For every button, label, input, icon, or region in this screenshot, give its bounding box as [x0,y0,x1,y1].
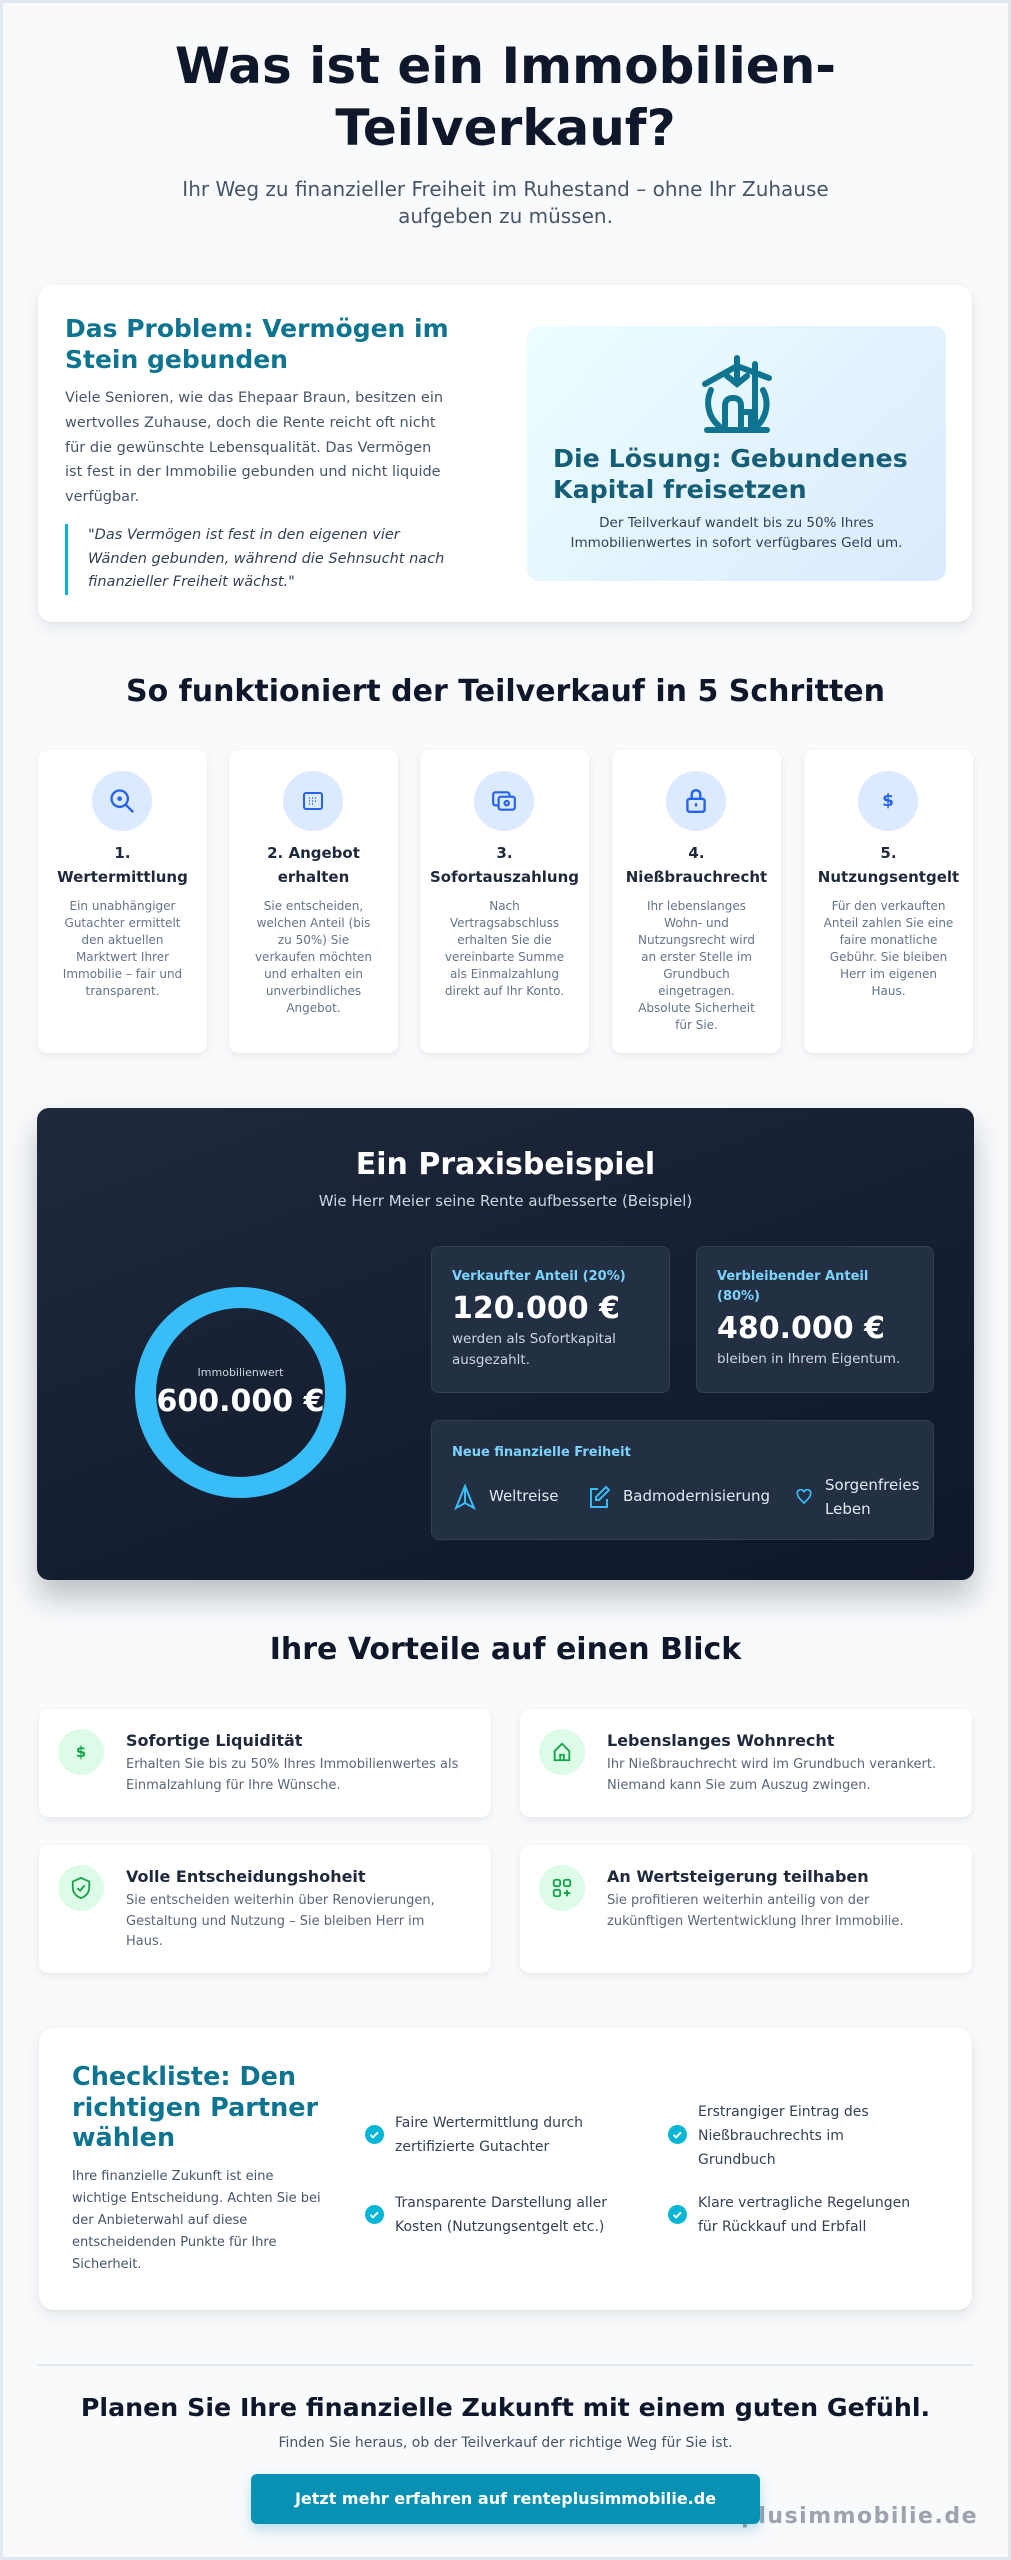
step 5: faire monatliche [840,933,937,947]
benefit: value growth: zukünftigen Wertentwicklung Ihrer Immobilie. [607,1914,904,1928]
box: remaining share: bleiben in Ihrem Eigentum. [717,1351,900,1367]
step 3: als Einmalzahlung [450,967,559,981]
benefit: residence right: Ihr Nießbrauchrecht wird im Grundbuch verankert. [607,1757,936,1772]
step 1: 1. [114,844,131,862]
check item 1 [365,2115,583,2155]
benefit: residence right [520,1709,972,1817]
box: sold share: 120.000 € [452,1291,620,1326]
check item 3: Kosten (Nutzungsentgelt etc.) [395,2219,604,2235]
box: new freedom: Badmodernisierung [623,1487,770,1505]
box: new freedom: Sorgenfreies [825,1476,919,1494]
step 1: Immobilie – fair und [63,967,182,981]
box: new freedom: Weltreise [489,1487,559,1505]
box: sold share [431,1246,670,1393]
heading: solution: Die Lösung: Gebundenes [553,444,908,473]
step 3: direkt auf Ihr Konto. [445,984,564,998]
benefit: decisions: Haus. [126,1934,163,1949]
panel: solution [527,326,946,581]
step 3: Sofortauszahlung [430,868,579,886]
heading: checklist: wählen [72,2123,175,2153]
check item 2: Nießbrauchrechts im [698,2128,844,2144]
benefit: residence right: Lebenslanges Wohnrecht [607,1731,834,1750]
icon: dollar [858,771,918,831]
quote: finanzieller Freiheit wächst." [88,574,295,590]
check item 3 [365,2195,607,2235]
text: problem: für die gewünschte Lebensqualität. Das Vermögen [65,440,431,456]
box: new freedom: Leben [825,1500,871,1518]
chart: ring: 600.000 € [157,1384,324,1419]
check item 1: zertifizierte Gutachter [395,2139,549,2155]
step 3: Nach [489,899,520,913]
heading: checklist: richtigen Partner [72,2092,318,2122]
step 2: 2. Angebot [267,844,360,862]
icon: calculator [283,771,343,831]
step 3 [420,750,589,1053]
benefit: liquidity: $ [76,1743,86,1761]
step 4: Nutzungsrecht wird [638,933,755,947]
icon: edit [590,1486,610,1508]
step 4: Wohn- und [664,916,729,930]
step 5: 5. [880,844,897,862]
box: sold share: Verkaufter Anteil (20%) [452,1269,626,1284]
chart: ring: Immobilienwert [198,1366,283,1379]
step 4 [612,750,781,1053]
text: checklist: Ihre finanzielle Zukunft ist eine [72,2169,273,2184]
benefit: decisions: Gestaltung und Nutzung – Sie bleiben Herr im [126,1914,424,1928]
step 1: Gutachter ermittelt [65,916,180,930]
step 5: Herr im eigenen [840,967,937,981]
step 2 [229,750,398,1053]
step 4: 4. [688,844,705,862]
step 2: Sie entscheiden, [264,899,363,913]
box: remaining share [696,1246,934,1393]
subtitle: Ihr Weg zu finanzieller Freiheit im Ruhestand – ohne Ihr Zuhause [182,177,829,201]
benefit: value growth [520,1845,972,1973]
heading: problem: Stein gebunden [65,345,288,374]
text: problem [65,390,443,505]
heading: benefits: Ihre Vorteile auf einen Blick [270,1632,741,1667]
heading: checklist: Checkliste: Den [72,2062,296,2092]
benefit: liquidity: Einmalzahlung für Ihre Wünsche. [126,1778,341,1792]
step 2: welchen Anteil (bis [257,916,370,930]
box: remaining share: (80%) [717,1289,760,1304]
step 4: Nießbrauchrecht [626,868,767,886]
heading: call to action: Planen Sie Ihre finanzielle Zukunft mit einem guten Gefühl. [81,2393,930,2422]
text: problem: ist fest in der Immobilie gebunden und nicht liquide [65,464,441,480]
title: Teilverkauf? [335,99,676,157]
subtitle: example: Wie Herr Meier seine Rente aufbesserte (Beispiel) [319,1192,692,1210]
quote [65,524,444,594]
icon: cash [474,771,534,831]
step 3: 3. [496,844,513,862]
box: sold share: ausgezahlt. [452,1352,530,1368]
step 5: Gebühr. Sie bleiben [830,950,947,964]
subtitle [182,177,829,228]
step 1: Marktwert Ihrer [76,950,169,964]
benefit: decisions: Volle Entscheidungshoheit [126,1867,366,1886]
benefit: decisions [39,1845,491,1973]
text: checklist: wichtige Entscheidung. Achten Sie bei [72,2191,321,2206]
step 4: Ihr lebenslanges [647,899,746,913]
benefit: decisions: Sie entscheiden weiterhin über Renovierungen, [126,1893,435,1908]
panel: problem and solution [38,285,972,622]
quote: "Das Vermögen ist fest in den eigenen vier [88,527,400,543]
benefit: liquidity: Sofortige Liquidität [126,1731,302,1750]
icon: travel [454,1484,476,1510]
step 2: unverbindliches [266,984,361,998]
step 4: an erster Stelle im [641,950,752,964]
text: problem: verfügbar. [65,489,139,505]
title: Was ist ein Immobilien- [175,37,836,95]
step 4: eingetragen. [658,984,735,998]
benefit: residence right: Niemand kann Sie zum Auszug zwingen. [607,1778,871,1792]
heading: problem: Das Problem: Vermögen im [65,314,449,343]
step 2: erhalten [278,868,349,886]
check item 1: Faire Wertermittlung durch [395,2115,583,2131]
button: call to action: Jetzt mehr erfahren auf renteplusimmobilie.de [295,2489,716,2508]
check item 2: Erstrangiger Eintrag des [698,2104,869,2120]
step 2: Angebot. [286,1001,341,1015]
step 5 [804,750,973,1053]
button: call to action [251,2474,760,2524]
step 3: erhalten Sie die [457,933,552,947]
step 2: zu 50%) Sie [278,933,349,947]
step 5: Anteil zahlen Sie eine [824,916,953,930]
step 2: verkaufen möchten [255,950,372,964]
text: solution: Immobilienwertes in sofort verfügbares Geld um. [571,535,902,551]
text: checklist [72,2169,321,2272]
step 5: Für den verkauften [832,899,945,913]
step 5: Haus. [871,984,906,998]
subtitle: aufgeben zu müssen. [398,204,613,228]
text: checklist: entscheidenden Punkte für Ihre [72,2235,276,2250]
step 4: Absolute Sicherheit [638,1001,755,1015]
text: call to action: Finden Sie heraus, ob der Teilverkauf der richtige Weg für Sie ist. [278,2435,733,2451]
box: remaining share: 480.000 € [717,1311,885,1346]
check item 4 [668,2195,910,2235]
icon: heart [796,1489,812,1504]
step 1: den aktuellen [81,933,164,947]
step 4: Grundbuch [663,967,730,981]
box: new freedom [431,1420,934,1540]
heading: problem [65,314,449,374]
text: checklist: der Anbieterwahl auf diese [72,2213,247,2228]
step 3: vereinbarte Summe [445,950,564,964]
heading: solution [553,444,908,504]
text: problem: wertvolles Zuhause, doch die Rente reicht oft nicht [65,415,436,431]
benefit: value growth: An Wertsteigerung teilhaben [607,1867,869,1886]
check item 3: Transparente Darstellung aller [395,2195,607,2211]
step 1: transparent. [86,984,160,998]
box: sold share: werden als Sofortkapital [452,1331,616,1347]
step 1: Wertermittlung [57,868,188,886]
icon: dollar: $ [882,791,894,811]
step 1: Ein unabhängiger [70,899,175,913]
panel: checklist [39,2028,972,2310]
heading: 5 steps: So funktioniert der Teilverkauf in 5 Schritten [126,674,885,709]
box: new freedom: Neue finanzielle Freiheit [452,1445,631,1460]
icon: house [702,355,772,433]
watermark: renteplusimmobilie.de [667,2504,978,2529]
benefit: liquidity [39,1709,491,1817]
text: solution [571,515,902,551]
heading: checklist [72,2062,318,2153]
check item 2 [668,2104,869,2168]
panel: practice example [37,1108,974,1580]
icon: search [92,771,152,831]
icon: lock [666,771,726,831]
step 5: Nutzungsentgelt [818,868,959,886]
benefit: value growth: Sie profitieren weiterhin anteilig von der [607,1893,869,1908]
step 2: und erhalten ein [264,967,363,981]
step 4: für Sie. [675,1018,718,1032]
check item 4: für Rückkauf und Erbfall [698,2219,866,2235]
quote: Wänden gebunden, während die Sehnsucht nach [88,550,444,566]
box: remaining share: Verbleibender Anteil [717,1269,868,1284]
chart: ring [135,1287,346,1498]
check item 4: Klare vertragliche Regelungen [698,2195,910,2211]
heading: example: Ein Praxisbeispiel [356,1147,655,1182]
text: checklist: Sicherheit. [72,2257,141,2272]
text: solution: Der Teilverkauf wandelt bis zu 50% Ihres [599,515,874,531]
check item 2: Grundbuch [698,2152,776,2168]
step 3: Vertragsabschluss [450,916,559,930]
title [175,37,836,157]
benefit: liquidity: Erhalten Sie bis zu 50% Ihres Immobilienwertes als [126,1757,458,1772]
text: problem: Viele Senioren, wie das Ehepaar Braun, besitzen ein [65,390,443,406]
step 1 [38,750,207,1053]
heading: solution: Kapital freisetzen [553,475,807,504]
